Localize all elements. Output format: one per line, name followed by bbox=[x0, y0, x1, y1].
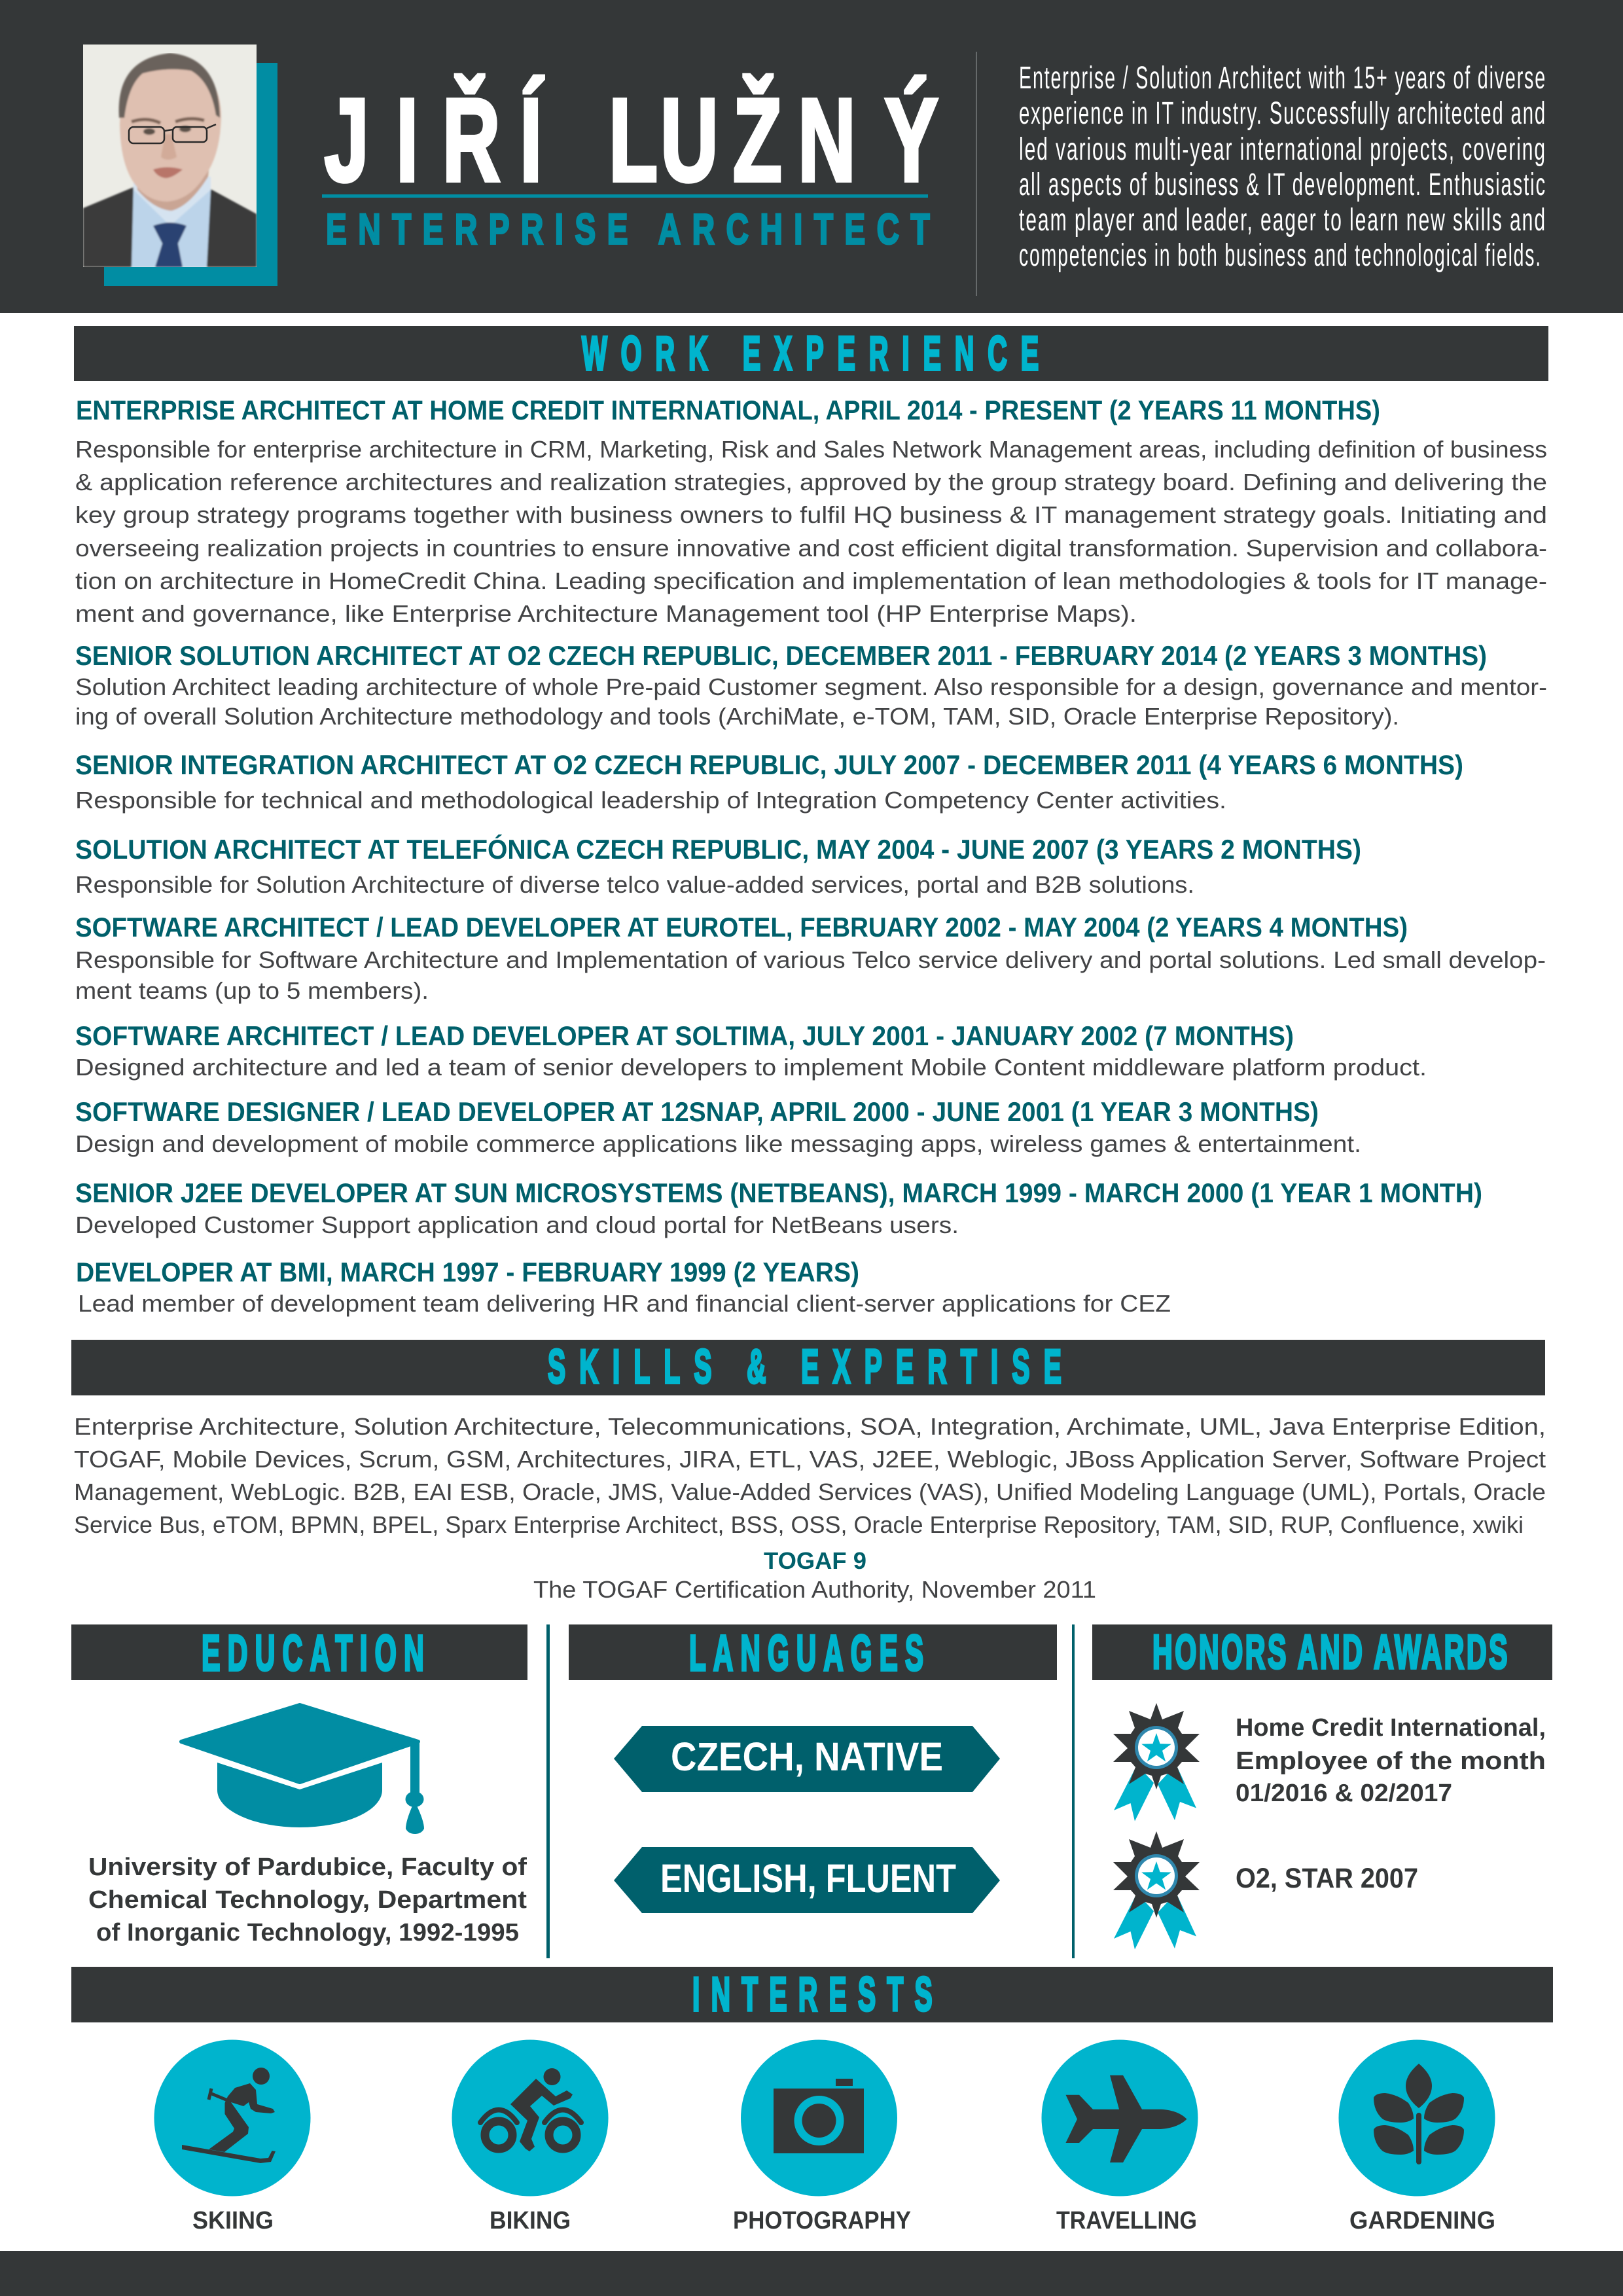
label: biking: BIKING bbox=[490, 2207, 571, 2234]
job: O2 senior solution architect: Solution Architect leading architecture of whole Pre-paid Customer segment. Also responsible for a design, governance and mentor- bbox=[75, 673, 1547, 700]
badge: English bbox=[614, 1847, 1000, 1913]
job: O2 senior solution architect: SENIOR SOLUTION ARCHITECT AT O2 CZECH REPUBLIC, DECEMBER 2011 - FEBRUARY 2014 (2 YEARS 3 MONTHS) bbox=[75, 640, 1487, 671]
job: Home Credit: & application reference architectures and realization strategies, approved by the group strategy board. Defining and delivering the bbox=[75, 469, 1547, 495]
job: Telefonica: SOLUTION ARCHITECT AT TELEFÓNICA CZECH REPUBLIC, MAY 2004 - JUNE 2007 (3 YEARS 2 MONTHS) bbox=[75, 833, 1361, 865]
icon: travelling bbox=[1042, 2039, 1198, 2197]
job: Eurotel: ment teams (up to 5 members). bbox=[75, 977, 429, 1004]
job: BMI bbox=[76, 1257, 1171, 1317]
award 1 text: Employee of the month bbox=[1236, 1748, 1546, 1775]
job: Eurotel: SOFTWARE ARCHITECT / LEAD DEVELOPER AT EUROTEL, FEBRUARY 2002 - MAY 2004 (2 YEARS 4 MONTHS) bbox=[75, 912, 1408, 942]
certification bbox=[533, 1547, 1096, 1603]
badge: English: ENGLISH, FLUENT bbox=[660, 1856, 956, 1901]
badge: Czech bbox=[614, 1726, 1000, 1792]
badge: Czech: CZECH, NATIVE bbox=[671, 1734, 943, 1779]
job subtitle: ENTERPRISE ARCHITECT bbox=[326, 204, 941, 253]
certification: TOGAF 9 bbox=[764, 1547, 866, 1574]
heading: education bbox=[71, 1624, 527, 1681]
footer band bbox=[0, 2251, 1623, 2296]
photo frame accent bbox=[104, 63, 277, 286]
panel: languages bbox=[569, 1624, 1057, 1913]
job: O2 senior solution architect bbox=[75, 640, 1547, 730]
skills list bbox=[74, 1413, 1546, 1538]
label: skiing: SKIING bbox=[192, 2207, 274, 2234]
job: Home Credit: tion on architecture in HomeCredit China. Leading specification and implementation of lean methodologies & tools for IT manage- bbox=[75, 567, 1547, 594]
job: Soltima bbox=[75, 1020, 1427, 1081]
job: Home Credit: key group strategy programs together with business owners to fulfil HQ business & IT management strategy goals. Initiating and bbox=[75, 501, 1547, 528]
job: Home Credit: ment and governance, like Enterprise Architecture Management tool (HP Enterprise Maps). bbox=[75, 600, 1137, 627]
job: O2 senior integration architect: Responsible for technical and methodological leadership of Integration Competency Center activities. bbox=[75, 787, 1226, 814]
panel: education bbox=[71, 1624, 527, 1946]
heading: education: EDUCATION bbox=[202, 1625, 431, 1681]
job: Sun Microsystems: Developed Customer Support application and cloud portal for NetBeans users. bbox=[75, 1211, 959, 1238]
job: 12Snap: Design and development of mobile commerce applications like messaging apps, wireless games & entertainment. bbox=[75, 1130, 1361, 1157]
job: Home Credit: ENTERPRISE ARCHITECT AT HOME CREDIT INTERNATIONAL, APRIL 2014 - PRESENT (2 YEARS 11 MONTHS) bbox=[76, 395, 1380, 425]
portrait photo bbox=[83, 45, 257, 267]
education text: University of Pardubice, Faculty of bbox=[88, 1854, 527, 1881]
award 1 text bbox=[1236, 1714, 1546, 1807]
heading: skills: SKILLS & EXPERTISE bbox=[548, 1340, 1075, 1393]
job: Telefonica: Responsible for Solution Architecture of diverse telco value-added services, portal and B2B solutions. bbox=[75, 871, 1194, 898]
job: Soltima: Designed architecture and led a team of senior developers to implement Mobile Content middleware platform product. bbox=[75, 1054, 1427, 1081]
education text: Chemical Technology, Department bbox=[88, 1886, 527, 1914]
job: Eurotel bbox=[75, 912, 1546, 1004]
panel: header bbox=[0, 0, 1623, 313]
job: BMI: Lead member of development team delivering HR and financial client-server applications for CEZ bbox=[78, 1290, 1171, 1317]
education text bbox=[88, 1854, 527, 1946]
label: travelling: TRAVELLING bbox=[1056, 2207, 1197, 2234]
award 1 text: Home Credit International, bbox=[1236, 1714, 1546, 1742]
icon: biking bbox=[452, 2039, 609, 2197]
job: Home Credit: Responsible for enterprise architecture in CRM, Marketing, Risk and Sales Network Management areas, including definition of business bbox=[75, 436, 1547, 463]
heading: work experience: WORK EXPERIENCE bbox=[582, 327, 1052, 380]
award 2 text: O2, STAR 2007 bbox=[1236, 1863, 1418, 1894]
job: Telefonica bbox=[75, 833, 1361, 898]
job: Home Credit bbox=[75, 395, 1547, 627]
profile summary bbox=[1019, 61, 1546, 273]
job: O2 senior solution architect: ing of overall Solution Architecture methodology and tools (ArchiMate, e-TOM, TAM, SID, Oracle Enterprise Repository). bbox=[75, 703, 1399, 730]
job: Eurotel: Responsible for Software Architecture and Implementation of various Telco service delivery and portal solutions. Led small develop- bbox=[75, 946, 1546, 973]
heading: interests: INTERESTS bbox=[692, 1968, 944, 2021]
award 1 text: 01/2016 & 02/2017 bbox=[1236, 1780, 1452, 1807]
job: 12Snap: SOFTWARE DESIGNER / LEAD DEVELOPER AT 12SNAP, APRIL 2000 - JUNE 2001 (1 YEAR 3 MONTHS) bbox=[75, 1096, 1319, 1127]
skills list: Service Bus, eTOM, BPMN, BPEL, Sparx Enterprise Architect, BSS, OSS, Oracle Enterprise Repository, TAM, SID, RUP, Confluence, xwiki bbox=[74, 1511, 1524, 1538]
panel: work experience bbox=[74, 326, 1548, 1317]
icon: graduation cap bbox=[181, 1705, 424, 1834]
icon: skiing bbox=[154, 2039, 310, 2197]
skills list: TOGAF, Mobile Devices, Scrum, GSM, Architectures, JIRA, ETL, VAS, J2EE, Weblogic, JBoss Application Server, Software Project bbox=[74, 1446, 1546, 1473]
icon: medal 2 bbox=[1113, 1831, 1200, 1949]
heading: languages: LANGUAGES bbox=[689, 1625, 931, 1681]
heading: languages bbox=[569, 1624, 1057, 1681]
heading: skills bbox=[71, 1340, 1545, 1395]
education text: of Inorganic Technology, 1992-1995 bbox=[96, 1919, 519, 1946]
job: O2 senior integration architect bbox=[75, 749, 1463, 814]
job: Sun Microsystems: SENIOR J2EE DEVELOPER AT SUN MICROSYSTEMS (NETBEANS), MARCH 1999 - MARCH 2000 (1 YEAR 1 MONTH) bbox=[75, 1177, 1482, 1208]
heading: work experience bbox=[74, 326, 1548, 381]
icon: medal 1 bbox=[1113, 1703, 1200, 1821]
panel: skills and expertise bbox=[71, 1340, 1546, 1603]
job: 12Snap bbox=[75, 1096, 1361, 1157]
panel: honors and awards bbox=[1092, 1624, 1552, 1949]
job: Soltima: SOFTWARE ARCHITECT / LEAD DEVELOPER AT SOLTIMA, JULY 2001 - JANUARY 2002 (7 MONTHS) bbox=[75, 1020, 1294, 1051]
title rule bbox=[322, 194, 928, 198]
certification: The TOGAF Certification Authority, November 2011 bbox=[533, 1576, 1096, 1603]
job: O2 senior integration architect: SENIOR INTEGRATION ARCHITECT AT O2 CZECH REPUBLIC, JULY 2007 - DECEMBER 2011 (4 YEARS 6 MONTHS) bbox=[75, 749, 1463, 780]
skills list: Enterprise Architecture, Solution Architecture, Telecommunications, SOA, Integration, Archimate, UML, Java Enterprise Edition, bbox=[74, 1413, 1546, 1440]
label: photography: PHOTOGRAPHY bbox=[733, 2207, 911, 2234]
label: gardening: GARDENING bbox=[1349, 2207, 1495, 2234]
icon: gardening bbox=[1339, 2039, 1495, 2197]
skills list: Management, WebLogic. B2B, EAI ESB, Oracle, JMS, Value-Added Services (VAS), Unified Modeling Language (UML), Portals, Oracle bbox=[74, 1479, 1546, 1505]
job: Home Credit: overseeing realization projects in countries to ensure innovative and cost efficient digital transformation. Supervision and collabora- bbox=[75, 535, 1547, 562]
job: BMI: DEVELOPER AT BMI, MARCH 1997 - FEBRUARY 1999 (2 YEARS) bbox=[76, 1257, 859, 1287]
heading: interests bbox=[71, 1967, 1553, 2022]
panel: interests bbox=[71, 1967, 1553, 2234]
icon: photography bbox=[741, 2039, 897, 2197]
name title: JIŘÍ LUŽNÝ bbox=[325, 74, 938, 206]
job: Sun Microsystems bbox=[75, 1177, 1482, 1238]
